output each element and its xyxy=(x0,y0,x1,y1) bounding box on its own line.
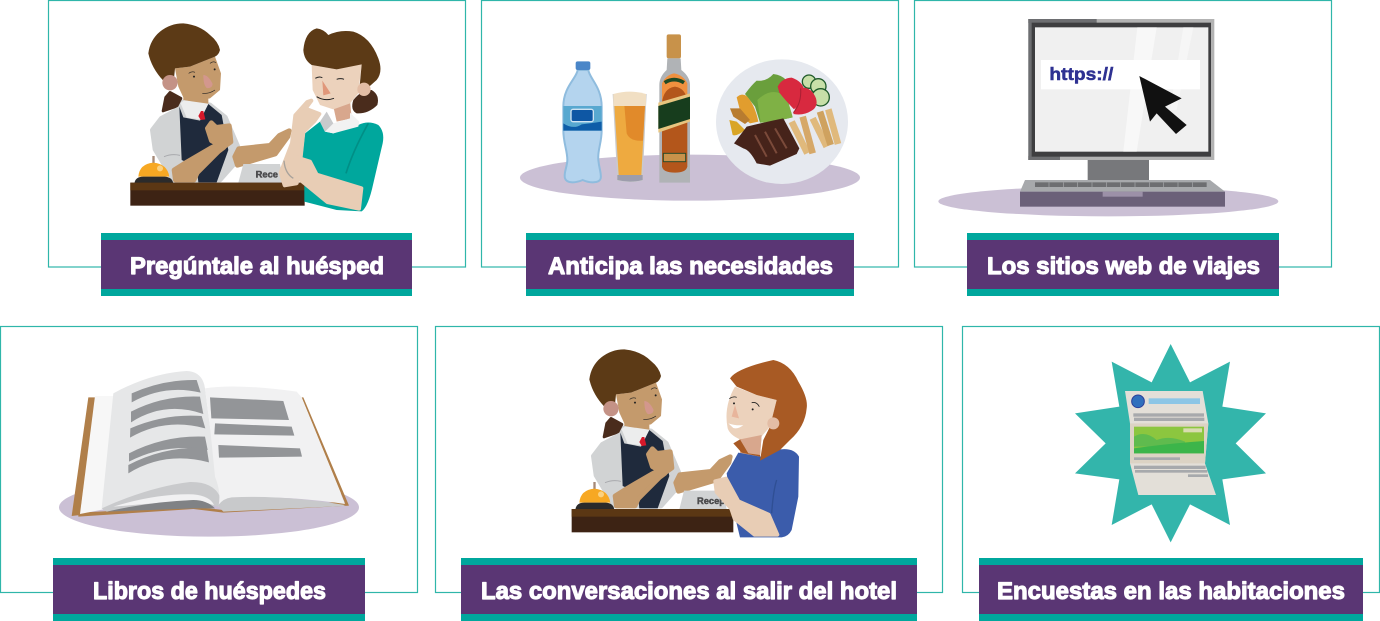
reception sign xyxy=(238,164,283,183)
illustration: survey on starburst xyxy=(1075,344,1266,542)
plate of food xyxy=(716,59,848,184)
panel frame xyxy=(48,0,466,267)
figure: guest in blue sweater xyxy=(715,360,807,537)
reception sign xyxy=(679,491,727,509)
label: Anticipa las necesidades xyxy=(526,233,854,296)
figure: guest in teal sweater xyxy=(281,28,383,211)
panel: Las conversaciones al salir del hotel xyxy=(436,326,942,621)
reception sign: Recep xyxy=(697,496,725,506)
panel: Anticipa las necesidades xyxy=(482,0,898,296)
icon: mouse cursor xyxy=(1139,76,1187,134)
figure: receptionist xyxy=(148,23,289,182)
label: Pregúntale al huésped xyxy=(101,233,412,296)
label: Encuestas en las habitaciones xyxy=(979,558,1363,621)
label: Las conversaciones al salir del hotel: Las conversaciones al salir del hotel xyxy=(481,578,897,605)
water bottle xyxy=(563,61,602,182)
reception counter xyxy=(572,509,733,532)
illustration: receptionist talking to guest in teal sweater xyxy=(130,23,383,211)
label: Los sitios web de viajes xyxy=(967,233,1279,296)
illustration: drinks and plate of food xyxy=(520,34,860,201)
label: Los sitios web de viajes: Los sitios web de viajes xyxy=(987,253,1260,280)
panel: Encuestas en las habitaciones xyxy=(962,326,1380,621)
reception counter xyxy=(130,183,305,206)
figure: receptionist xyxy=(589,349,730,508)
illustration: receptionist talking to guest in blue sweater xyxy=(572,349,807,537)
keyboard xyxy=(1020,180,1225,207)
monitor xyxy=(1028,19,1214,160)
desk bell xyxy=(134,156,173,184)
panel frame xyxy=(436,326,942,592)
label: Libros de huéspedes: Libros de huéspedes xyxy=(93,578,326,605)
illustration: desktop computer xyxy=(938,19,1278,216)
panel: Libros de huéspedes xyxy=(0,326,418,621)
desk bell xyxy=(575,482,614,510)
panel frame xyxy=(962,326,1380,592)
table shadow xyxy=(938,186,1278,216)
table shadow xyxy=(59,478,359,537)
icon: teal starburst xyxy=(1075,344,1266,542)
glass of beer xyxy=(613,92,647,182)
illustration: open guest book xyxy=(59,371,359,537)
survey document xyxy=(1125,391,1216,495)
label: Las conversaciones al salir del hotel xyxy=(461,558,917,621)
address bar: https:// xyxy=(1049,64,1113,84)
group: sign, counter and guest xyxy=(572,360,807,537)
label: Libros de huéspedes xyxy=(53,558,365,621)
address bar xyxy=(1041,60,1200,89)
panel frame xyxy=(482,0,898,267)
table shadow xyxy=(520,155,860,201)
panel frame xyxy=(0,326,418,592)
text lines xyxy=(128,380,302,473)
label: Pregúntale al huésped: Pregúntale al huésped xyxy=(130,253,384,280)
label: Anticipa las necesidades: Anticipa las necesidades xyxy=(548,253,833,280)
panel: Los sitios web de viajes xyxy=(914,0,1332,296)
open book xyxy=(72,371,349,517)
reception sign: Rece xyxy=(256,169,278,179)
whisky bottle xyxy=(658,34,690,183)
panel: Pregúntale al huésped xyxy=(48,0,466,296)
panel frame xyxy=(914,0,1332,267)
label: Encuestas en las habitaciones: Encuestas en las habitaciones xyxy=(997,578,1345,605)
monitor stand xyxy=(1088,160,1149,180)
